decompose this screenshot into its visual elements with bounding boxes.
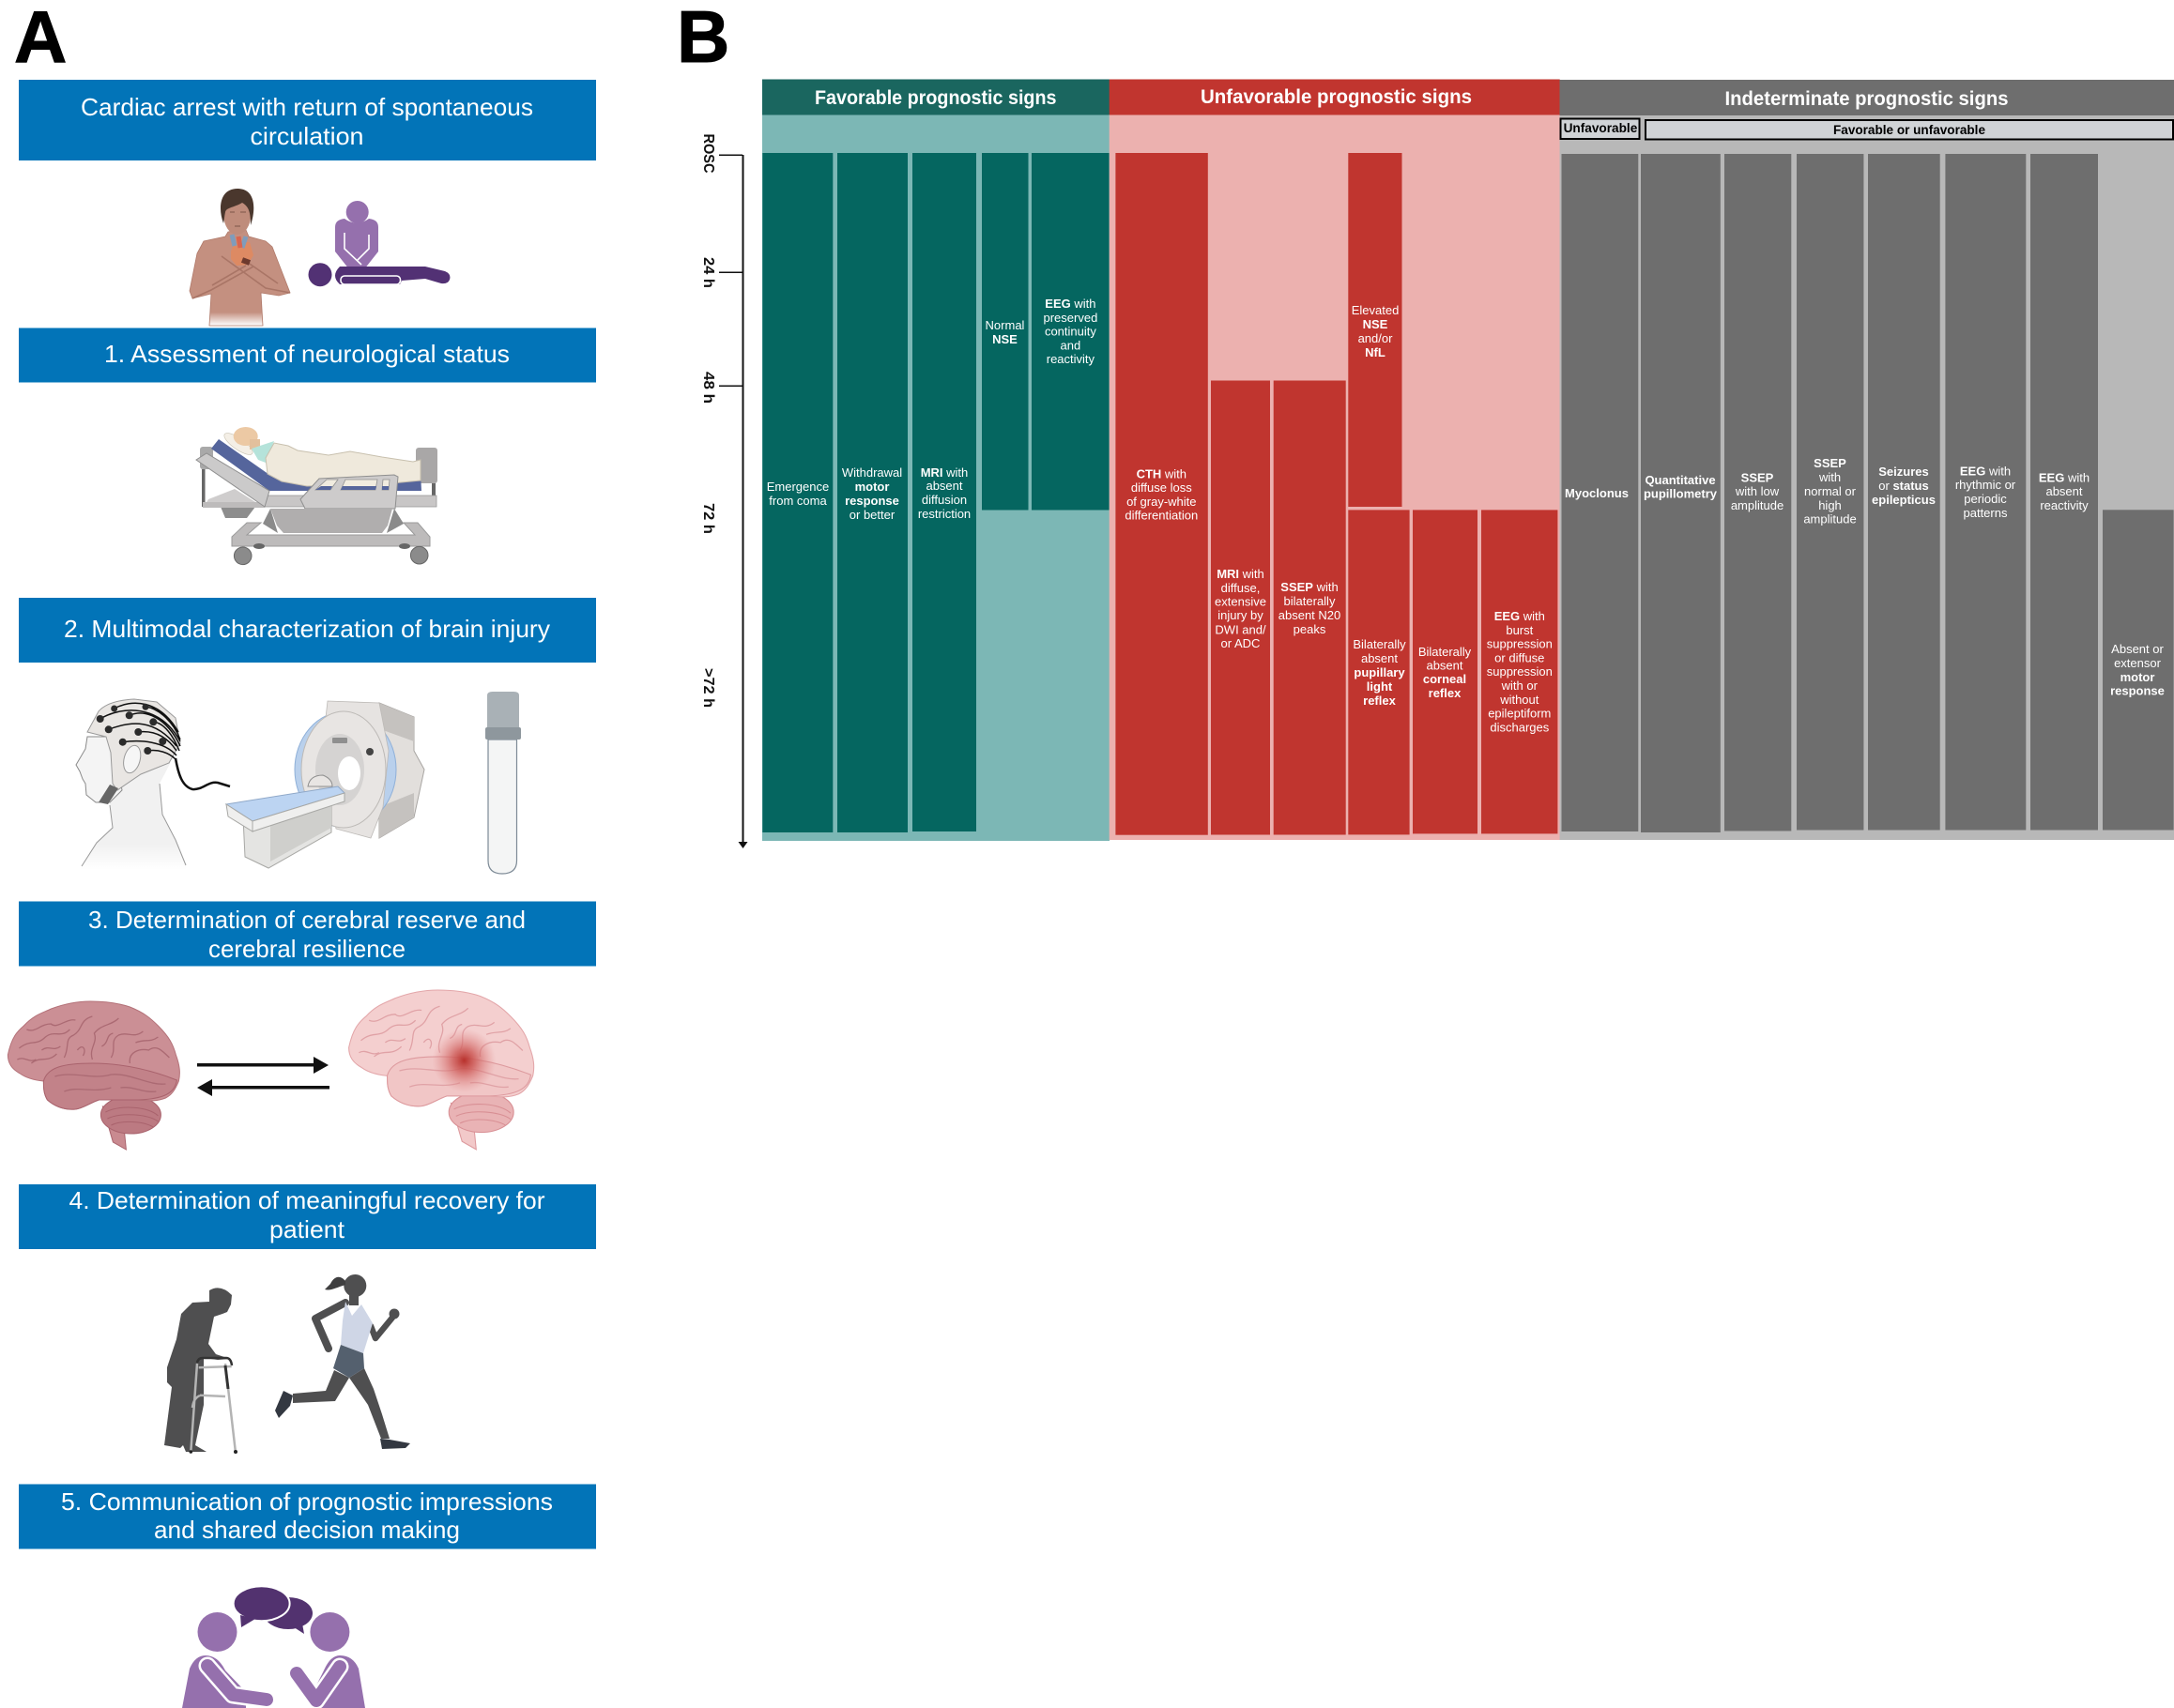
bar: elevated NSE: NSE (1363, 317, 1388, 331)
timeline axis: 24 h (700, 257, 716, 288)
timeline axis: 48 h (700, 372, 716, 404)
timeline axis: 72 h (700, 503, 716, 534)
bar: SSEP absent N20: absent N20 (1278, 608, 1340, 622)
bar: withdrawal motor response: response (845, 494, 899, 508)
bar: MRI absent diffusion restriction: diffusion (922, 493, 967, 507)
bar: EEG burst suppression: epileptiform (1488, 707, 1551, 721)
icon: healthy brain (8, 1001, 179, 1150)
bar: EEG burst suppression: without (1499, 693, 1539, 707)
icon: elderly person with walker (164, 1288, 237, 1454)
bar: pupillary light reflex: reflex (1363, 694, 1397, 708)
bar: quantitative pupillometry (1641, 154, 1721, 832)
bar: EEG rhythmic or periodic: patterns (1964, 506, 2008, 520)
bar: SSEP absent N20: SSEP with (1280, 580, 1339, 594)
bar: elevated NSE (1348, 153, 1402, 507)
bar: EEG preserved continuity: preserved (1043, 311, 1097, 325)
bar: absent or extensor motor response: response (2110, 683, 2165, 698)
bar: MRI absent diffusion restriction: restriction (918, 507, 971, 521)
bar: EEG absent reactivity: EEG with (2039, 471, 2090, 484)
bar: EEG burst suppression: suppression (1487, 664, 1553, 679)
bar: CTH: differentiation (1125, 509, 1198, 522)
bar: SSEP normal or high amplitude (1797, 154, 1863, 830)
bar: EEG rhythmic or periodic: periodic (1964, 492, 2007, 506)
bar: SSEP low amplitude: with low (1735, 484, 1780, 498)
bar: SSEP low amplitude: SSEP (1741, 471, 1774, 484)
bar: pupillary light reflex: Bilaterally (1353, 637, 1406, 651)
icon: patient with heart (190, 189, 290, 326)
bar: EEG burst suppression: suppression (1487, 637, 1553, 651)
icon: hospital bed with patient (196, 427, 437, 565)
header: indeterminate (1560, 80, 2174, 115)
bar: SSEP normal or high amplitude: high (1818, 498, 1842, 512)
bar: EEG preserved continuity: continuity (1045, 325, 1096, 338)
bar: EEG absent reactivity: absent (2045, 484, 2083, 498)
heading: cardiac arrest: circulation (250, 122, 364, 150)
bar: EEG preserved continuity: EEG with (1045, 297, 1096, 311)
bar: pupillary light reflex: pupillary (1354, 665, 1405, 679)
bar: corneal reflex: absent (1426, 659, 1463, 672)
header: unfavorable: Unfavorable prognostic signs (1201, 86, 1472, 108)
bar: seizures or status epilepticus: or status (1878, 479, 1929, 493)
bar: quantitative pupillometry: pupillometry (1644, 486, 1718, 501)
header: favorable: Favorable prognostic signs (815, 87, 1057, 109)
heading: step 3 (19, 901, 596, 967)
bar: EEG absent reactivity: reactivity (2040, 498, 2089, 512)
heading: step 4: patient (269, 1215, 345, 1243)
timeline axis: >72 h (700, 668, 716, 708)
header: indeterminate: Indeterminate prognostic signs (1725, 88, 2009, 110)
timeline axis: ROSC (700, 133, 716, 174)
bar: SSEP absent N20 (1274, 381, 1346, 835)
bar: emergence from coma: from coma (769, 494, 827, 508)
heading: step 5 (19, 1485, 596, 1548)
bar: CTH: of gray-white (1126, 495, 1197, 509)
icon: MRI scanner (226, 701, 424, 868)
bar: corneal reflex: corneal (1423, 672, 1466, 686)
bar: EEG burst suppression: discharges (1490, 720, 1550, 734)
bar: EEG burst suppression: burst (1506, 623, 1534, 637)
icon: injured brain (349, 990, 534, 1150)
bar: MRI diffuse injury: MRI with (1217, 567, 1264, 581)
arrow: injury to reserve (197, 1079, 329, 1096)
heading: cardiac arrest: Cardiac arrest with return of spontaneous (81, 93, 533, 121)
bar: CTH: diffuse loss (1131, 480, 1192, 495)
bar: MRI diffuse injury: extensive (1215, 595, 1266, 608)
bar: SSEP absent N20: peaks (1294, 622, 1326, 636)
label: favorable or unfavorable: Favorable or unfavorable (1833, 122, 1985, 137)
icon: CPR pictogram (308, 201, 450, 286)
bar: withdrawal motor response: or better (850, 508, 896, 522)
bar: seizures or status epilepticus (1868, 154, 1940, 830)
bar: EEG burst suppression (1481, 510, 1557, 833)
bar: SSEP absent N20: bilaterally (1284, 594, 1336, 608)
bar: EEG preserved continuity: reactivity (1047, 352, 1095, 366)
header: favorable (762, 79, 1110, 114)
bar: absent or extensor motor response (2103, 510, 2174, 830)
heading: step 1: 1. Assessment of neurological status (104, 340, 510, 368)
bar: EEG burst suppression: or diffuse (1494, 650, 1544, 664)
icon: running woman (275, 1274, 410, 1449)
bar: withdrawal motor response: motor (855, 480, 889, 494)
bar: MRI diffuse injury: or ADC (1221, 636, 1260, 650)
heading: step 3: cerebral resilience (208, 935, 406, 963)
heading: cardiac arrest (19, 80, 596, 160)
bar: EEG rhythmic or periodic (1945, 154, 2026, 830)
bar: SSEP low amplitude: amplitude (1731, 498, 1784, 512)
bar: pupillary light reflex: light (1367, 679, 1393, 694)
bar: EEG rhythmic or periodic: EEG with (1960, 464, 2011, 479)
bar: CTH: CTH with (1137, 467, 1187, 480)
bar: elevated NSE: and/or (1358, 331, 1393, 345)
heading: step 1 (19, 328, 596, 383)
bar: emergence from coma: Emergence (767, 480, 829, 494)
bar: normal NSE: NSE (992, 332, 1018, 346)
bar: MRI diffuse injury: injury by (1217, 608, 1263, 622)
bar: MRI diffuse injury: DWI and/ (1215, 623, 1266, 636)
label: favorable or unfavorable (1646, 120, 2173, 139)
icon: EEG cap on head (76, 699, 230, 870)
panel: unfavorable prognostic signs (1110, 79, 1560, 840)
bar: MRI absent diffusion restriction: MRI with (921, 465, 968, 480)
label: unfavorable: Unfavorable (1564, 120, 1637, 135)
bar: seizures or status epilepticus: Seizures (1878, 465, 1929, 479)
bar: SSEP normal or high amplitude: normal or (1804, 484, 1857, 498)
header: unfavorable (1110, 79, 1560, 114)
panel B: prognostic signs timeline (677, 0, 2174, 848)
heading: step 3: 3. Determination of cerebral reserve and (88, 906, 526, 934)
bar: EEG rhythmic or periodic: rhythmic or (1955, 478, 2016, 492)
heading: step 5: 5. Communication of prognostic impressions (61, 1487, 553, 1516)
bar: EEG absent reactivity (2030, 154, 2098, 830)
bar: myoclonus (1562, 154, 1638, 831)
bar: corneal reflex: Bilaterally (1418, 645, 1472, 659)
arrow: reserve to injury (197, 1057, 329, 1074)
bar: withdrawal motor response: Withdrawal (842, 465, 902, 480)
bar: seizures or status epilepticus: epilepticus (1872, 493, 1936, 507)
bar: normal NSE: Normal (986, 318, 1025, 332)
icon: two people talking (182, 1586, 365, 1708)
bar: MRI absent diffusion restriction (912, 153, 976, 831)
bar: emergence from coma (762, 153, 833, 832)
icon: blood test tube (485, 692, 521, 874)
bar: elevated NSE: Elevated (1352, 303, 1399, 317)
bar: MRI absent diffusion restriction: absent (926, 479, 963, 493)
heading: step 4 (19, 1184, 596, 1249)
panel: indeterminate prognostic signs (1560, 80, 2174, 840)
bar: EEG preserved continuity (1032, 153, 1110, 511)
bar: SSEP normal or high amplitude: amplitude (1803, 512, 1857, 526)
bar: quantitative pupillometry: Quantitative (1645, 473, 1716, 487)
bar: absent or extensor motor response: Absent or (2111, 642, 2164, 656)
bar: absent or extensor motor response: motor (2120, 670, 2154, 684)
bar: pupillary light reflex (1348, 510, 1410, 834)
bar: EEG burst suppression: EEG with (1494, 609, 1545, 623)
bar: EEG preserved continuity: and (1061, 338, 1080, 353)
bar: EEG burst suppression: with or (1501, 679, 1539, 693)
panel: favorable prognostic signs (762, 79, 1110, 841)
panel A: prognostication workflow (8, 0, 596, 1708)
heading: step 5: and shared decision making (154, 1516, 460, 1544)
bar: withdrawal motor response (837, 153, 908, 832)
heading: step 4: 4. Determination of meaningful recovery for (69, 1186, 545, 1214)
bar: SSEP low amplitude (1724, 154, 1791, 831)
bar: myoclonus: Myoclonus (1565, 486, 1629, 500)
bar: corneal reflex (1413, 510, 1477, 833)
heading: step 2 (19, 598, 596, 663)
bar: CTH (1115, 153, 1208, 835)
timeline axis (700, 133, 747, 848)
bar: SSEP normal or high amplitude: with (1818, 470, 1841, 484)
bar: corneal reflex: reflex (1429, 686, 1462, 700)
bar: SSEP normal or high amplitude: SSEP (1814, 456, 1846, 470)
bar: elevated NSE: NfL (1365, 345, 1386, 359)
bar: normal NSE (982, 153, 1029, 511)
bar: absent or extensor motor response: extensor (2114, 656, 2162, 670)
bar: MRI diffuse injury (1211, 381, 1270, 835)
bar: pupillary light reflex: absent (1361, 651, 1398, 665)
heading: step 2: 2. Multimodal characterization of brain injury (64, 615, 550, 643)
bar: MRI diffuse injury: diffuse, (1221, 581, 1260, 595)
